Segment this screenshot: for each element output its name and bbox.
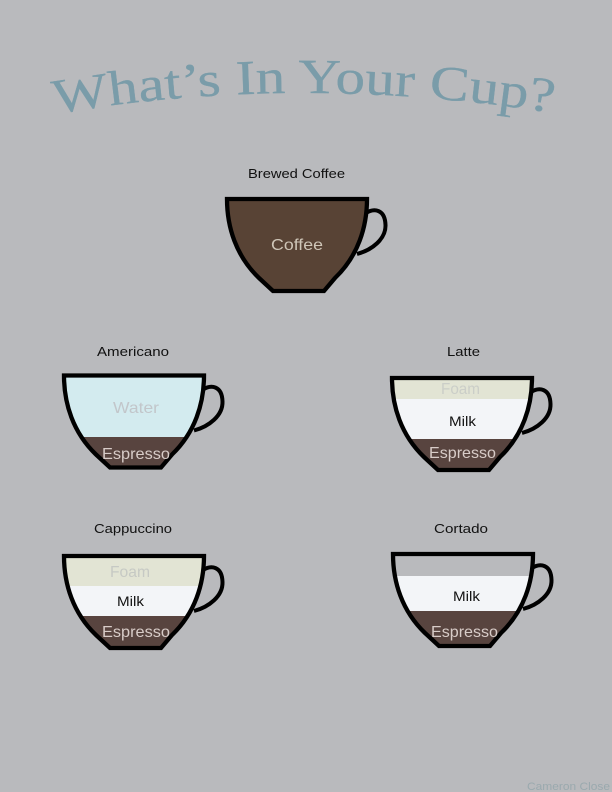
panel: latte [390, 344, 551, 472]
label: water: Water [113, 400, 160, 417]
label: coffee: Coffee [271, 237, 323, 254]
label: espresso: Espresso [429, 445, 496, 462]
label: espresso: Espresso [102, 446, 170, 463]
label: foam: Foam [441, 381, 480, 398]
heading: cortado: Cortado [434, 521, 488, 536]
panel: americano [62, 344, 223, 470]
panel: cortado [391, 521, 552, 648]
label: milk: Milk [117, 594, 144, 609]
panel: cappuccino [62, 521, 223, 650]
icon: brewed coffee cup [225, 197, 386, 293]
heading: americano: Americano [97, 344, 169, 359]
heading: brewed coffee: Brewed Coffee [248, 166, 345, 181]
title: What’s In Your Cup? [50, 60, 554, 118]
icon: cappuccino cup [62, 554, 223, 650]
icon: americano cup [62, 374, 223, 470]
icon: cortado cup [391, 554, 552, 648]
label: milk: Milk [453, 589, 480, 604]
icon: latte cup [390, 376, 551, 472]
heading: cappuccino: Cappuccino [94, 521, 172, 536]
label: espresso: Espresso [431, 624, 498, 641]
label: espresso: Espresso [102, 624, 170, 641]
panel: brewed coffee [225, 166, 386, 293]
heading: latte: Latte [447, 344, 480, 359]
label: foam: Foam [110, 564, 150, 581]
label: milk: Milk [449, 414, 476, 429]
